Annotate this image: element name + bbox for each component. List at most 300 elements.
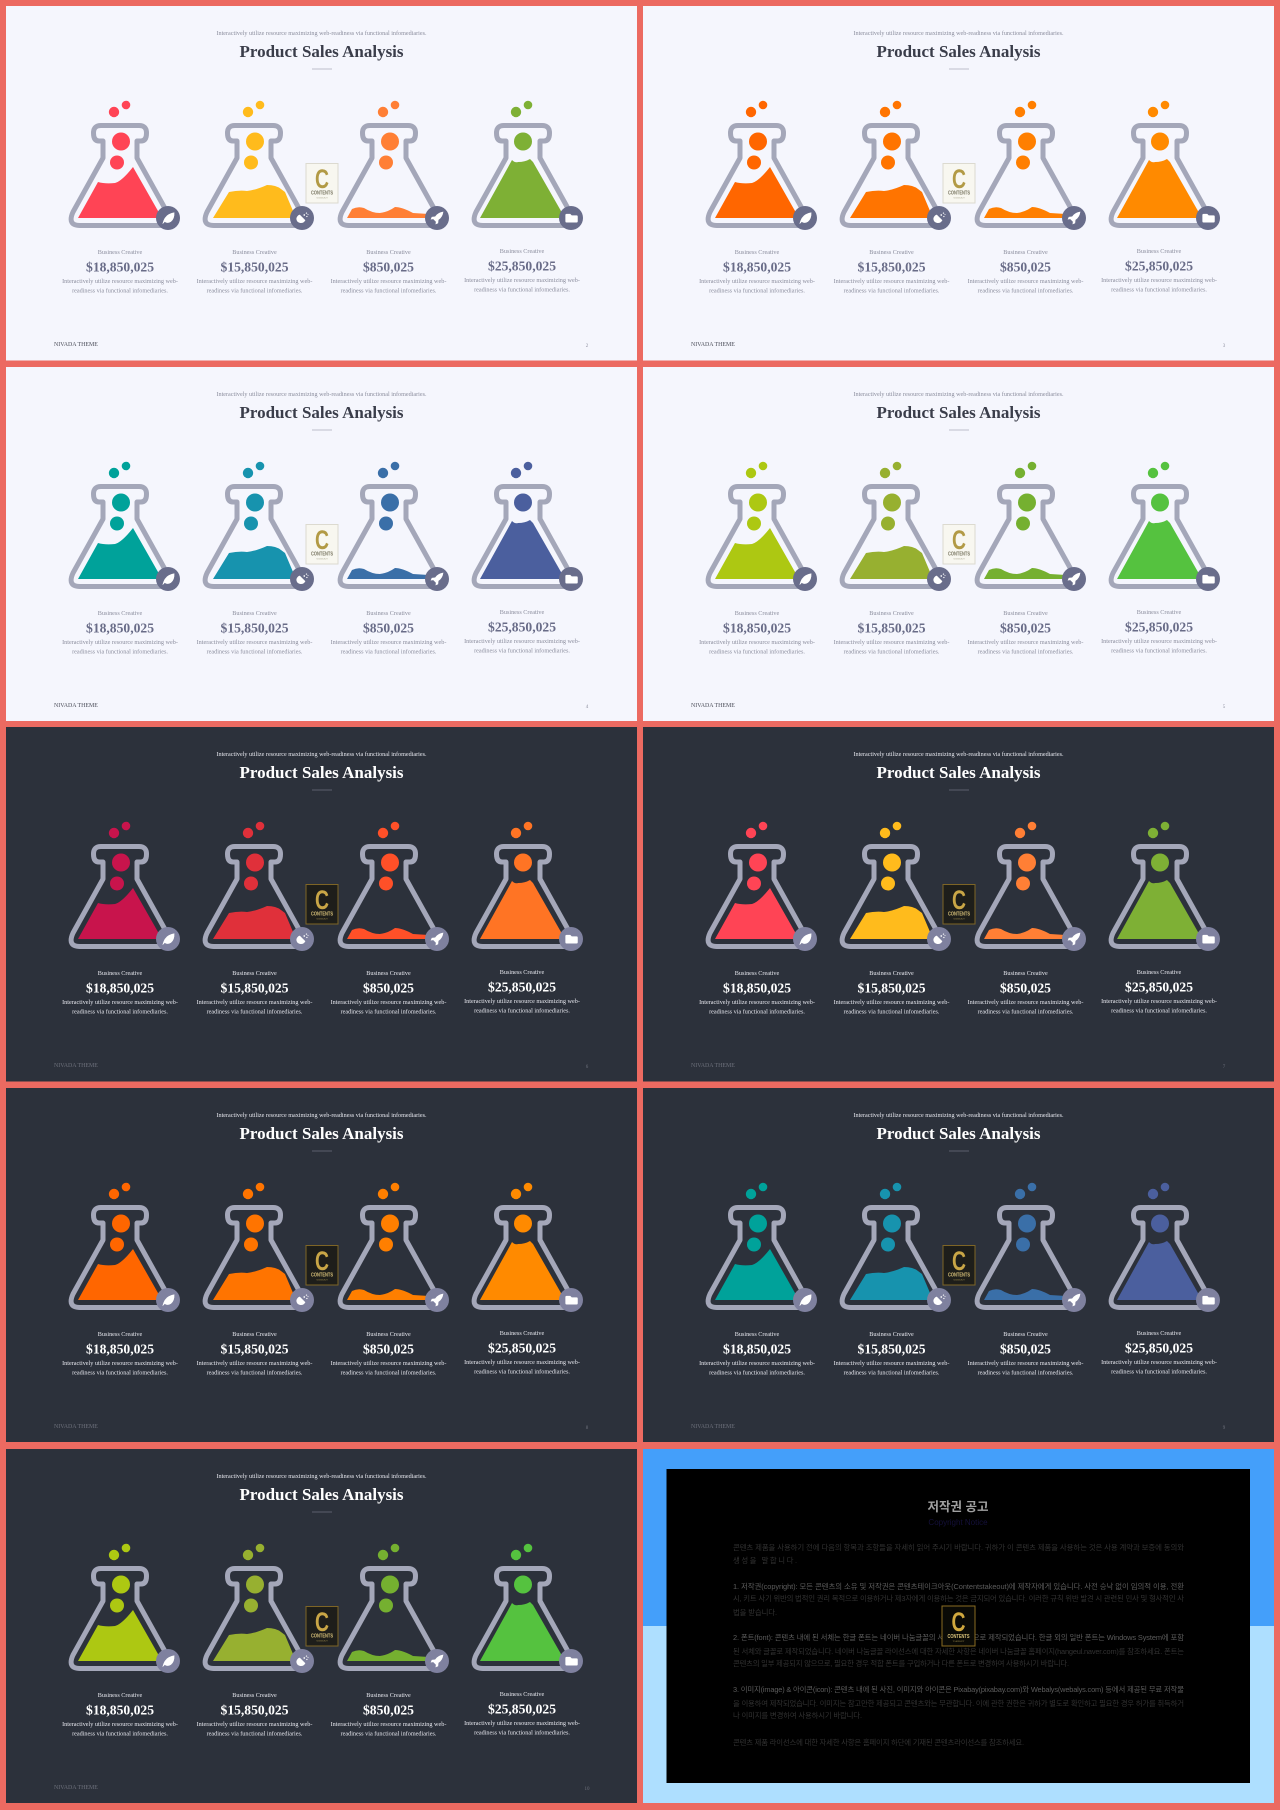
flask: cyan bomb [205, 462, 314, 591]
flask: green folder [474, 101, 583, 230]
caption 4: Interactively utilize resource maximizing web- [464, 1359, 580, 1366]
flask: yellow bomb [842, 822, 951, 951]
logo badge: TAKEOUT [953, 196, 965, 200]
panel: copyright notice [643, 1449, 1274, 1803]
caption 1: Business Creative [735, 1331, 780, 1338]
caption 3: Business Creative [366, 1331, 411, 1338]
caption 3: Interactively utilize resource maximizing web- [968, 639, 1083, 646]
caption 4: Business Creative [1137, 609, 1182, 616]
title: Product Sales Analysis [239, 1124, 404, 1143]
caption 4: readiness via functional infomediaries. [474, 1008, 570, 1014]
flask: amber folder [474, 1183, 583, 1312]
caption 1: Business Creative [98, 1331, 143, 1338]
page number: 9 [1223, 1426, 1226, 1431]
caption 4 [1101, 609, 1217, 654]
caption 3: readiness via functional infomediaries. [978, 1370, 1074, 1376]
flask: orange rocket [977, 101, 1086, 230]
panel: slide 2 light orange [643, 6, 1274, 360]
subtitle: Interactively utilize resource maximizing web-readiness via functional infomediaries. [853, 751, 1064, 758]
caption 4: readiness via functional infomediaries. [1111, 286, 1207, 294]
logo badge [306, 524, 338, 564]
caption 4: Business Creative [500, 609, 545, 616]
caption 1: Business Creative [98, 970, 143, 977]
slide background [643, 727, 1274, 1082]
logo badge: CONTENTS [948, 190, 971, 196]
flask: orange bomb [842, 101, 951, 230]
caption 3: Business Creative [366, 1692, 411, 1699]
caption 2: Interactively utilize resource maximizing web- [197, 639, 312, 646]
caption 4: Business Creative [500, 1691, 545, 1698]
logo badge: CONTENTS [948, 1272, 971, 1278]
caption 4: Interactively utilize resource maximizing web- [464, 638, 580, 645]
caption 2: readiness via functional infomediaries. [844, 1008, 940, 1016]
paragraph 1 copyright: 시, 키트 사기 위반의 법적인 권리 목적으로 이용하거나 제3자에게 이용하는 것은 금지되어 있습니다. 이러한 규칙 위반 발견 시 관련된 민사 및 형사적인 사 [733, 1594, 1184, 1603]
caption 2: Interactively utilize resource maximizing web- [197, 999, 312, 1006]
caption 4: $25,850,025 [1125, 1340, 1193, 1356]
caption 1: Business Creative [735, 610, 780, 617]
caption 4: $25,850,025 [488, 1340, 556, 1356]
logo badge centered: C [952, 1607, 966, 1637]
logo badge: TAKEOUT [316, 1278, 328, 1282]
flask: red leaf [708, 822, 817, 951]
footer brand: NIVADA THEME [691, 342, 735, 348]
title: Product Sales Analysis [876, 763, 1041, 782]
caption 4 [1101, 248, 1217, 294]
logo badge: CONTENTS [948, 552, 971, 558]
logo badge [306, 164, 338, 203]
logo badge: C [315, 525, 329, 555]
caption 3 [331, 1331, 446, 1376]
caption 2: Business Creative [232, 1692, 277, 1699]
slide background [6, 727, 637, 1082]
caption 3: Business Creative [1003, 1331, 1048, 1338]
caption 4 [464, 969, 580, 1014]
caption 2: $15,850,025 [221, 620, 289, 636]
caption 1: Interactively utilize resource maximizing web- [699, 278, 815, 285]
logo badge centered: CONTENTS [948, 1634, 970, 1640]
page number: 7 [1223, 1065, 1226, 1070]
logo badge: C [952, 525, 966, 555]
caption 3: Business Creative [366, 249, 411, 256]
caption 3: Interactively utilize resource maximizing web- [331, 1360, 446, 1367]
intro paragraph: 콘텐츠 제품을 사용하기 전에 다음의 항목과 조항들을 자세히 읽어 주시기 바랍니다. 귀하가 이 콘텐츠 제품을 사용하는 것은 사용 계약과 보증에 동의와 [733, 1543, 1184, 1552]
subtitle: Interactively utilize resource maximizing web-readiness via functional infomediaries. [853, 1112, 1064, 1119]
panel: slide 3 light teal [6, 367, 637, 721]
caption 3 [331, 1692, 446, 1738]
subtitle: Interactively utilize resource maximizing web-readiness via functional infomediaries. [216, 1112, 427, 1119]
caption 2: $15,850,025 [858, 980, 926, 996]
caption 4: Interactively utilize resource maximizing web- [1101, 1359, 1217, 1366]
logo badge: TAKEOUT [316, 558, 328, 560]
page number: 2 [586, 344, 589, 349]
flask: lime leaf [708, 462, 817, 591]
title: Product Sales Analysis [876, 403, 1041, 422]
caption 1 [62, 970, 178, 1016]
logo badge [306, 1246, 338, 1285]
caption 1: Interactively utilize resource maximizing web- [699, 639, 815, 646]
caption 2: Business Creative [232, 249, 277, 256]
paragraph 1 copyright [733, 1582, 1184, 1617]
logo badge: C [952, 885, 966, 915]
flask: blue rocket [340, 462, 449, 591]
footer brand: NIVADA THEME [54, 342, 98, 348]
logo badge: TAKEOUT [316, 196, 328, 200]
slide background [6, 6, 637, 360]
footer brand: NIVADA THEME [54, 1063, 98, 1069]
caption 2: Business Creative [232, 970, 277, 977]
caption 3: $850,025 [363, 1702, 414, 1718]
slide background [6, 1088, 637, 1442]
flask: orange leaf [708, 101, 817, 230]
caption 3 [331, 970, 446, 1016]
caption 3: Business Creative [1003, 970, 1048, 977]
logo badge: CONTENTS [311, 1272, 334, 1278]
logo badge centered: TAKEOUT [953, 1640, 965, 1643]
caption 4: $25,850,025 [1125, 980, 1193, 994]
subtitle: Interactively utilize resource maximizing web-readiness via functional infomediaries. [853, 30, 1064, 37]
caption 2: Business Creative [869, 1331, 914, 1338]
logo badge: TAKEOUT [316, 1640, 328, 1642]
caption 2: readiness via functional infomediaries. [207, 1008, 303, 1016]
subtitle: Interactively utilize resource maximizing web-readiness via functional infomediaries. [216, 391, 427, 398]
caption 3: $850,025 [1000, 620, 1051, 636]
slide background [6, 1449, 637, 1803]
logo badge: C [952, 1246, 966, 1276]
flask: orange rocket [340, 101, 449, 230]
flask: yellow bomb [205, 101, 314, 230]
logo badge: TAKEOUT [316, 918, 328, 920]
caption 2 [197, 970, 312, 1016]
caption 1: readiness via functional infomediaries. [72, 1008, 168, 1016]
flask: red leaf [71, 101, 180, 230]
caption 2: readiness via functional infomediaries. [844, 648, 940, 656]
caption 3: Interactively utilize resource maximizing web- [331, 278, 446, 285]
caption 3: readiness via functional infomediaries. [341, 1370, 437, 1376]
caption 4: Business Creative [1137, 969, 1182, 976]
caption 3 [968, 970, 1083, 1016]
caption 2: $15,850,025 [221, 260, 289, 274]
caption 4: $25,850,025 [1125, 620, 1193, 634]
caption 1: Interactively utilize resource maximizing web- [62, 278, 178, 285]
caption 3 [968, 1331, 1083, 1376]
caption 1: readiness via functional infomediaries. [72, 1730, 168, 1738]
logo badge: CONTENTS [311, 1634, 334, 1640]
caption 2: Interactively utilize resource maximizing web- [197, 278, 312, 285]
caption 3: $850,025 [1000, 980, 1051, 996]
caption 1: readiness via functional infomediaries. [709, 288, 805, 294]
flask: lime leaf [71, 1544, 180, 1673]
caption 4: $25,850,025 [488, 258, 556, 274]
caption 4: $25,850,025 [488, 620, 556, 634]
caption 3: $850,025 [363, 260, 414, 274]
caption 3: Business Creative [366, 970, 411, 977]
caption 1: readiness via functional infomediaries. [72, 288, 168, 294]
caption 4: readiness via functional infomediaries. [474, 1368, 570, 1376]
caption 2: Interactively utilize resource maximizing web- [197, 1721, 312, 1728]
caption 1: $18,850,025 [86, 1702, 154, 1718]
caption 1: Interactively utilize resource maximizing web- [62, 1360, 178, 1367]
subtitle: Interactively utilize resource maximizing web-readiness via functional infomediaries. [216, 30, 427, 37]
footer brand: NIVADA THEME [691, 703, 735, 709]
title: Product Sales Analysis [876, 42, 1041, 61]
caption 4: $25,850,025 [488, 980, 556, 994]
caption 2 [197, 610, 312, 656]
caption 2: readiness via functional infomediaries. [844, 288, 940, 294]
caption 3: Business Creative [366, 610, 411, 617]
caption 1: $18,850,025 [723, 620, 791, 636]
caption 3 [968, 610, 1083, 656]
caption 3: Interactively utilize resource maximizing web- [968, 278, 1083, 285]
caption 3 [968, 249, 1083, 294]
caption 3: Interactively utilize resource maximizing web- [968, 999, 1083, 1006]
caption 3: Interactively utilize resource maximizing web- [331, 639, 446, 646]
caption 2 [834, 970, 949, 1016]
caption 1 [699, 1331, 815, 1376]
caption 2: readiness via functional infomediaries. [207, 1370, 303, 1376]
caption 1 [62, 1331, 178, 1376]
paragraph 2 font: 콘텐츠의 일부 제공되지 않으므로, 필요한 경우 적합 폰트를 구입하거나 다른 폰트로 변경하여 사용하시기 바랍니다. [733, 1659, 1069, 1668]
caption 2: Interactively utilize resource maximizing web- [197, 1360, 312, 1367]
logo badge: CONTENTS [311, 552, 334, 558]
paragraph 3 image and icon: 을 이용하여 제작되었습니다. 이미지는 참고만한 제공되고 콘텐츠와는 무관합니다. 이에 관한 권한은 귀하가 별도로 확인하고 필요한 경우 허가를 취득하거 [733, 1699, 1184, 1708]
caption 4: Interactively utilize resource maximizing web- [464, 1720, 580, 1727]
page number: 4 [586, 705, 589, 710]
flask: green rocket [340, 1544, 449, 1673]
caption 2 [834, 249, 949, 294]
caption 1: $18,850,025 [723, 260, 791, 274]
closing line: 콘텐츠 제품 라이선스에 대한 자세한 사항은 홈페이지 하단에 기재된 콘텐츠라이선스를 참조하세요. [733, 1738, 1024, 1747]
panel: slide 9 dark lime [6, 1449, 637, 1803]
logo badge: C [315, 1607, 329, 1637]
logo badge: TAKEOUT [953, 1278, 965, 1282]
caption 2: $15,850,025 [858, 620, 926, 636]
caption 2: Interactively utilize resource maximizing web- [834, 639, 949, 646]
caption 1: Business Creative [735, 970, 780, 977]
caption 1: $18,850,025 [723, 980, 791, 996]
caption 3: readiness via functional infomediaries. [341, 1008, 437, 1016]
flask: green rocket [977, 462, 1086, 591]
caption 4 [464, 1330, 580, 1376]
panel: slide 4 light lime [643, 367, 1274, 721]
caption 1: $18,850,025 [86, 620, 154, 636]
logo badge [943, 164, 975, 203]
footer brand: NIVADA THEME [54, 1424, 98, 1430]
caption 4: readiness via functional infomediaries. [474, 286, 570, 294]
caption 4 [464, 609, 580, 654]
caption 2: $15,850,025 [221, 1342, 289, 1356]
flask: teal leaf [71, 462, 180, 591]
panel: slide 5 dark crimson [6, 727, 637, 1082]
flask: orange leaf [71, 1183, 180, 1312]
caption 1 [62, 249, 178, 294]
logo badge [306, 884, 338, 924]
slide background [643, 1088, 1274, 1442]
caption 3: readiness via functional infomediaries. [978, 648, 1074, 656]
caption 4 [464, 248, 580, 294]
caption 2: Business Creative [869, 970, 914, 977]
caption 4: Interactively utilize resource maximizing web- [1101, 277, 1217, 284]
caption 1: $18,850,025 [723, 1342, 791, 1356]
caption 1: readiness via functional infomediaries. [709, 1008, 805, 1016]
paragraph 2 font: 2. 폰트(font): 콘텐츠 내에 된 서체는 한글 폰트는 네이버 나눔글꼴의 서체를 기반으로 제작되었습니다. 한글 외의 일반 폰트는 Windows System에 포함 [733, 1633, 1184, 1642]
caption 1: readiness via functional infomediaries. [72, 648, 168, 656]
logo badge: CONTENTS [311, 912, 334, 918]
page number: 3 [1223, 344, 1226, 349]
flask: orange rocket [340, 1183, 449, 1312]
panel: slide 1 light warm [6, 6, 637, 360]
caption 3 [331, 249, 446, 294]
caption 1: Business Creative [98, 249, 143, 256]
title: Product Sales Analysis [876, 1124, 1041, 1143]
logo badge: C [952, 164, 966, 194]
caption 1 [699, 970, 815, 1016]
black notice box [666, 1469, 1250, 1783]
caption 3: readiness via functional infomediaries. [341, 1730, 437, 1738]
flask: amber folder [1111, 101, 1220, 230]
caption 1: Interactively utilize resource maximizing web- [699, 1360, 815, 1367]
caption 2: Business Creative [232, 1331, 277, 1338]
logo badge [943, 524, 975, 564]
caption 1: readiness via functional infomediaries. [709, 1370, 805, 1376]
upper blue background [643, 1449, 1274, 1626]
caption 2: Business Creative [869, 249, 914, 256]
flask: bright green folder [1111, 462, 1220, 591]
caption 3: $850,025 [363, 620, 414, 636]
caption 1: Business Creative [98, 610, 143, 617]
flask: olive bomb [842, 462, 951, 591]
title: Product Sales Analysis [239, 42, 404, 61]
caption 4 [1101, 1330, 1217, 1376]
caption 4 [464, 1691, 580, 1736]
caption 4: Interactively utilize resource maximizing web- [1101, 998, 1217, 1005]
caption 3: $850,025 [363, 980, 414, 996]
caption 2: $15,850,025 [221, 1702, 289, 1718]
title: Product Sales Analysis [239, 1485, 404, 1504]
flask: blue rocket [977, 1183, 1086, 1312]
caption 2: $15,850,025 [858, 260, 926, 274]
slide background [643, 6, 1274, 360]
logo badge: C [315, 885, 329, 915]
paragraph 3 image and icon [733, 1685, 1184, 1720]
caption 1: Interactively utilize resource maximizing web- [62, 1721, 178, 1728]
caption 1: $18,850,025 [86, 260, 154, 274]
caption 2: Business Creative [232, 610, 277, 617]
page number: 10 [584, 1787, 590, 1792]
panel: slide 7 dark orange [6, 1088, 637, 1442]
flask: orange folder [474, 822, 583, 951]
caption 3: Interactively utilize resource maximizing web- [331, 999, 446, 1006]
caption 3: readiness via functional infomediaries. [978, 288, 1074, 294]
flask: red bomb [205, 822, 314, 951]
caption 2: readiness via functional infomediaries. [207, 648, 303, 656]
caption 4: Interactively utilize resource maximizing web- [464, 277, 580, 284]
notice subtitle: Copyright Notice [928, 1518, 988, 1527]
caption 4: readiness via functional infomediaries. [1111, 648, 1207, 654]
caption 3: $850,025 [363, 1342, 414, 1356]
logo badge: TAKEOUT [953, 558, 965, 560]
caption 3: Interactively utilize resource maximizing web- [331, 1721, 446, 1728]
flask: crimson leaf [71, 822, 180, 951]
caption 2: $15,850,025 [221, 980, 289, 996]
slide background [643, 367, 1274, 721]
title: Product Sales Analysis [239, 403, 404, 422]
caption 4: Interactively utilize resource maximizing web- [1101, 638, 1217, 645]
paragraph 3 image and icon: 3. 이미지(image) & 아이콘(icon): 콘텐츠 내에 된 사진, 이미지와 아이콘은 Pixabay(pixabay.com)와 Webalys(webalys.com) 등에서 제공된 무료 저작물 [733, 1685, 1184, 1694]
caption 4: Business Creative [500, 248, 545, 255]
flask: indigo folder [1111, 1183, 1220, 1312]
caption 2: readiness via functional infomediaries. [207, 1730, 303, 1738]
paragraph 1 copyright: 법을 받습니다. [733, 1608, 777, 1617]
logo badge: CONTENTS [311, 190, 334, 196]
flask: orange rocket [977, 822, 1086, 951]
caption 1 [699, 610, 815, 656]
logo badge: C [315, 164, 329, 194]
caption 2 [197, 1331, 312, 1376]
caption 1 [62, 1692, 178, 1738]
logo badge: TAKEOUT [953, 918, 965, 920]
flask: bright green folder [474, 1544, 583, 1673]
flask: teal leaf [708, 1183, 817, 1312]
caption 1: Interactively utilize resource maximizing web- [62, 639, 178, 646]
caption 3 [331, 610, 446, 656]
logo badge centered [942, 1606, 975, 1646]
caption 1: $18,850,025 [86, 980, 154, 996]
caption 2: Interactively utilize resource maximizing web- [834, 1360, 949, 1367]
caption 3: $850,025 [1000, 260, 1051, 274]
caption 1: readiness via functional infomediaries. [709, 648, 805, 656]
footer brand: NIVADA THEME [54, 703, 98, 709]
flask: cyan bomb [842, 1183, 951, 1312]
caption 1: Interactively utilize resource maximizing web- [62, 999, 178, 1006]
caption 4: Business Creative [500, 1330, 545, 1337]
logo badge [943, 884, 975, 924]
logo badge [306, 1606, 338, 1646]
caption 1 [699, 249, 815, 294]
paragraph 1 copyright: 1. 저작권(copyright): 모든 콘텐츠의 소유 및 저작권은 콘텐츠테이크아웃(Contentstakeout)에 제작자에게 있습니다. 사전 승낙 없이 임의적 이용, 전환 [733, 1582, 1184, 1591]
caption 2 [834, 610, 949, 656]
logo badge [943, 1246, 975, 1285]
caption 4: Business Creative [1137, 1330, 1182, 1337]
caption 4 [1101, 969, 1217, 1014]
paragraph 3 image and icon: 나 이미지를 변경하여 사용하시기 바랍니다. [733, 1711, 862, 1720]
caption 2 [197, 1692, 312, 1738]
caption 4: Interactively utilize resource maximizing web- [464, 998, 580, 1005]
page number: 5 [1223, 705, 1226, 710]
footer brand: NIVADA THEME [691, 1063, 735, 1069]
subtitle: Interactively utilize resource maximizing web-readiness via functional infomediaries. [216, 1473, 427, 1480]
footer brand: NIVADA THEME [691, 1424, 735, 1430]
caption 3: readiness via functional infomediaries. [341, 648, 437, 656]
caption 4: Business Creative [500, 969, 545, 976]
caption 3: Interactively utilize resource maximizing web- [968, 1360, 1083, 1367]
flask: indigo folder [474, 462, 583, 591]
caption 3: readiness via functional infomediaries. [978, 1008, 1074, 1016]
flask: orange bomb [205, 1183, 314, 1312]
paragraph 2 font [733, 1633, 1184, 1668]
caption 1: Business Creative [735, 249, 780, 256]
caption 1: Business Creative [98, 1692, 143, 1699]
flask: olive bomb [205, 1544, 314, 1673]
logo badge: C [315, 1246, 329, 1276]
logo badge: CONTENTS [948, 912, 971, 918]
panel: slide 6 dark warm [643, 727, 1274, 1082]
subtitle: Interactively utilize resource maximizing web-readiness via functional infomediaries. [216, 751, 427, 758]
caption 2: readiness via functional infomediaries. [844, 1370, 940, 1376]
caption 4: Business Creative [1137, 248, 1182, 255]
page number: 6 [586, 1065, 589, 1070]
caption 3: Business Creative [1003, 610, 1048, 617]
caption 4: readiness via functional infomediaries. [474, 648, 570, 654]
